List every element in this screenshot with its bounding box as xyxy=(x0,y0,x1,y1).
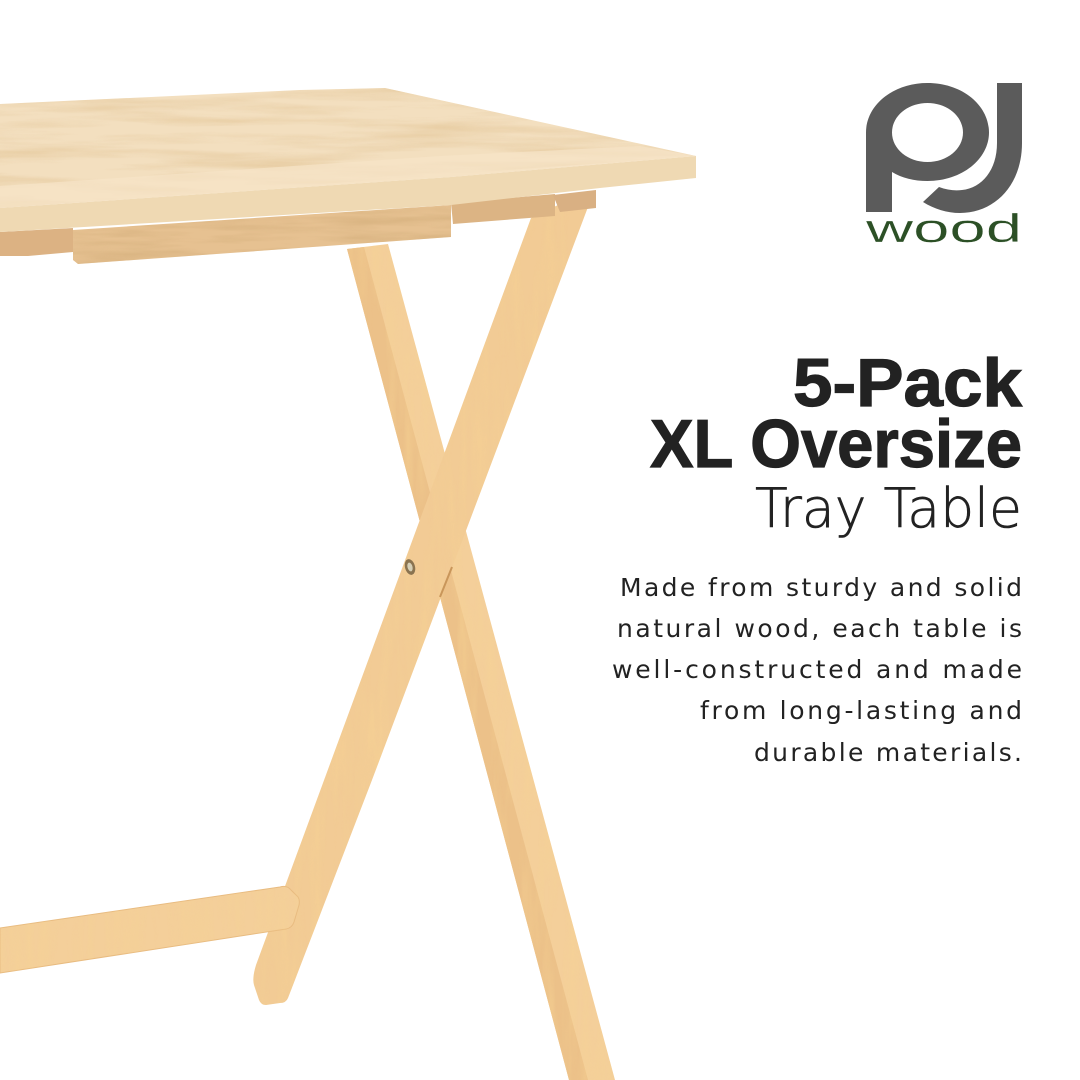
pivot bolt xyxy=(403,558,417,576)
heading line: Tray Table: Tray Table xyxy=(755,477,1022,540)
body text: from long-lasting and xyxy=(700,696,1022,725)
table top surface xyxy=(0,85,700,210)
apron board xyxy=(73,205,451,264)
front leg xyxy=(250,200,595,1010)
logo wordmark: wood xyxy=(864,207,1022,251)
logo mark xyxy=(866,83,1022,213)
heading line: XL Oversize: XL Oversize xyxy=(650,406,1022,482)
back leg xyxy=(340,240,620,1080)
body text: natural wood, each table is xyxy=(617,614,1022,643)
body text xyxy=(612,573,1022,767)
table top edge xyxy=(0,156,696,232)
body text: well-constructed and made xyxy=(612,655,1022,684)
left side rail under top xyxy=(0,228,73,256)
heading xyxy=(650,345,1022,540)
logo: PJ wood xyxy=(864,83,1022,251)
floor crossbar xyxy=(0,886,300,974)
right side rail under top xyxy=(451,194,555,224)
photo: folding tray table xyxy=(0,85,700,1080)
heading line: 5-Pack: 5-Pack xyxy=(793,345,1022,421)
body text: Made from sturdy and solid xyxy=(620,573,1022,602)
leg top block xyxy=(553,190,596,212)
body text: durable materials. xyxy=(754,738,1022,767)
